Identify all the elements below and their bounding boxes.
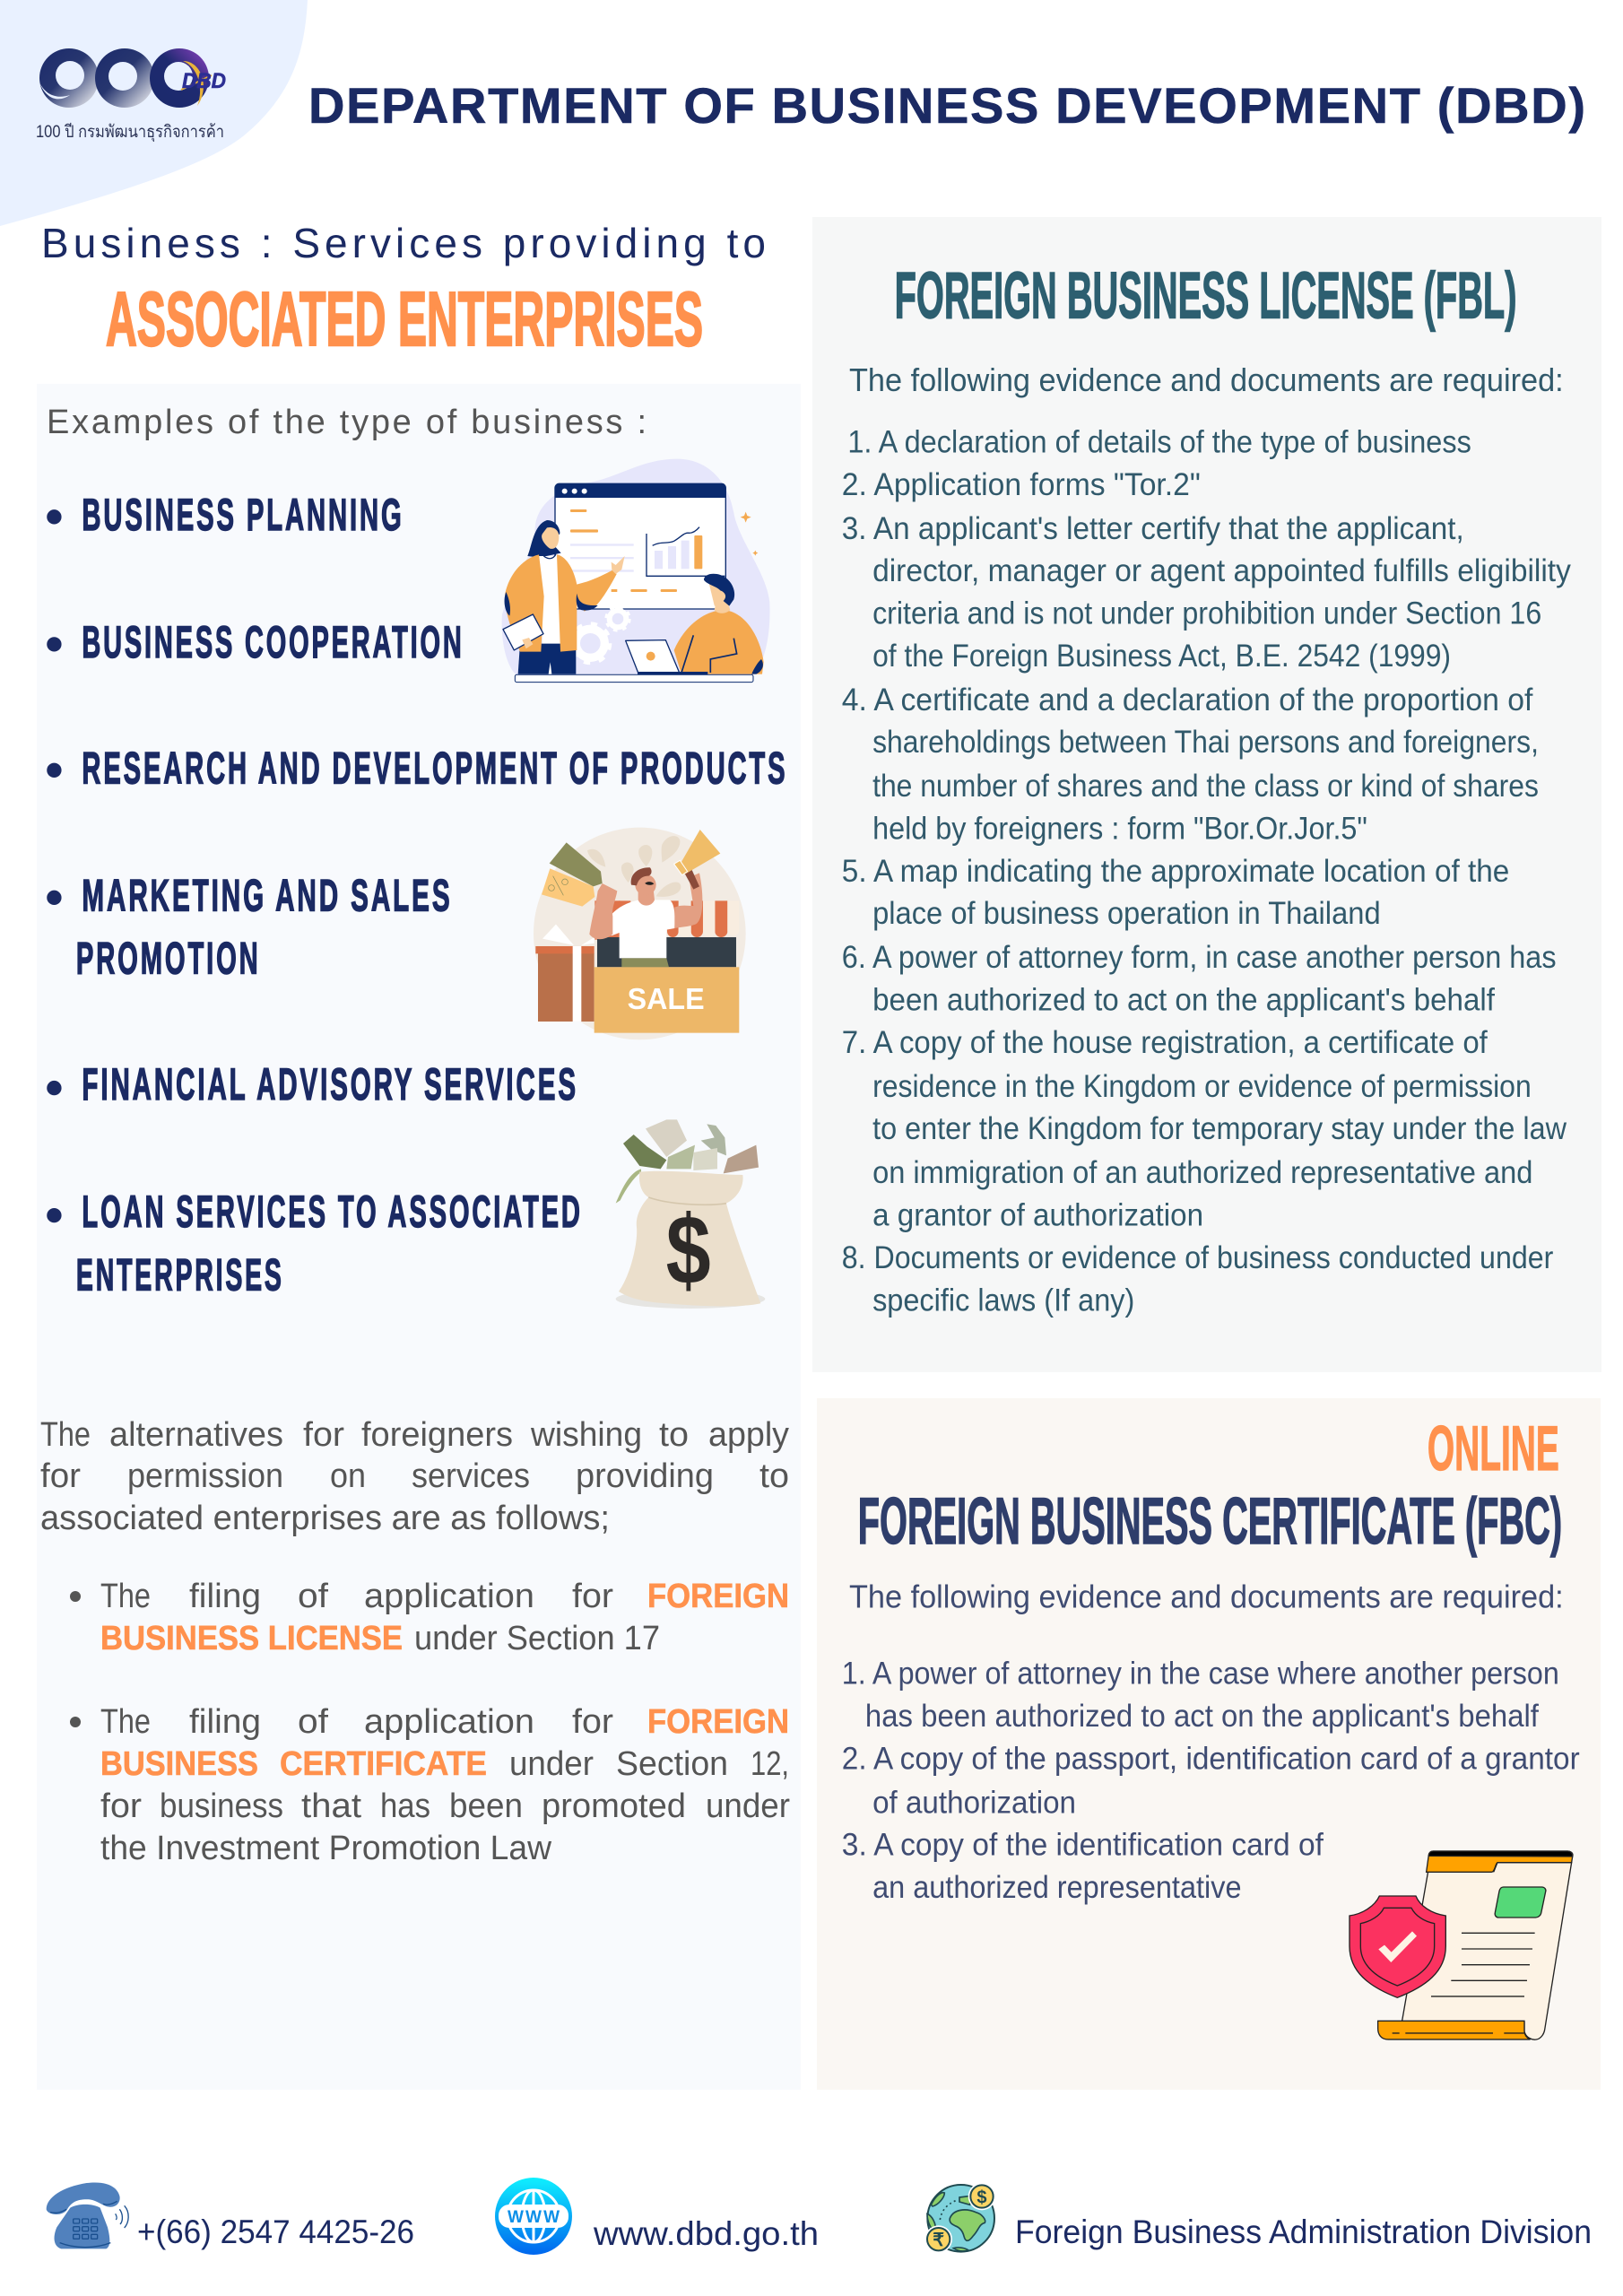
bullet: foreign business license: for — [572, 1578, 613, 1615]
business type list: BUSINESS PLANNING — [82, 490, 404, 540]
icon: earth with coins — [924, 2183, 995, 2253]
required documents list: specific laws (If any) — [872, 1283, 1134, 1318]
bullet: foreign business certificate: filing — [189, 1703, 261, 1741]
business type list: BUSINESS COOPERATION — [82, 617, 464, 667]
required documents list: 1. A declaration of details of the type of business — [847, 425, 1471, 460]
required documents list — [842, 1657, 1580, 1905]
required documents list: 8. Documents or evidence of business conducted under — [842, 1240, 1554, 1275]
alternatives paragraph: for — [303, 1416, 344, 1454]
icon: document with shield — [1350, 1851, 1573, 2039]
business type list — [47, 490, 787, 1300]
bullet: foreign business license: under Section 17 — [414, 1620, 660, 1657]
alternatives paragraph: for — [40, 1457, 81, 1495]
bullet: foreign business certificate: business — [160, 1787, 283, 1825]
alternatives paragraph: to — [659, 1416, 689, 1454]
required documents list: 3. A copy of the identification card of — [842, 1828, 1324, 1863]
alternatives paragraph: apply — [708, 1416, 789, 1454]
website address: www.dbd.go.th — [593, 2215, 819, 2252]
alternatives paragraph: foreigners — [361, 1416, 513, 1454]
alternatives paragraph: The — [40, 1416, 91, 1454]
business type list: FINANCIAL ADVISORY SERVICES — [82, 1059, 578, 1109]
bullet: foreign business certificate: under — [509, 1745, 594, 1783]
required documents list: the number of shares and the class or kind of shares — [872, 769, 1539, 804]
bullet: foreign business license: FOREIGN — [647, 1578, 789, 1615]
footer: phone — [47, 2182, 414, 2250]
required documents list: of authorization — [872, 1785, 1076, 1820]
alternatives paragraph: to — [759, 1457, 789, 1495]
bullet: foreign business license: filing — [189, 1578, 261, 1615]
bullet: foreign business certificate: has — [380, 1787, 430, 1825]
bullet: foreign business certificate: the Investment Promotion Law — [100, 1830, 552, 1867]
icon: money bag: $ — [666, 1196, 711, 1306]
required documents list: criteria and is not under prohibition under Section 16 — [872, 596, 1541, 631]
required documents list: a grantor of authorization — [872, 1198, 1203, 1233]
heading: associated enterprises: ASSOCIATED ENTERPRISES — [106, 277, 703, 362]
bullet: foreign business certificate: promoted — [542, 1787, 686, 1825]
panel: online foreign business certificate — [817, 1398, 1601, 2090]
bullet: foreign business certificate: for — [100, 1787, 142, 1825]
phone number: +(66) 2547 4425-26 — [137, 2213, 414, 2250]
required documents list: of the Foreign Business Act, B.E. 2542 (1999) — [872, 639, 1451, 674]
bullet: foreign business license: of — [298, 1578, 328, 1615]
alternatives paragraph: wishing — [530, 1416, 642, 1454]
footer: division — [924, 2183, 1592, 2253]
icon: earth with coins: ₹ — [933, 2231, 944, 2250]
icon: www globe — [495, 2178, 572, 2255]
subtitle: Business : Services providing to — [41, 220, 766, 266]
business type list: ENTERPRISES — [76, 1249, 284, 1300]
bullet: foreign business certificate: Section — [616, 1745, 728, 1783]
division name: Foreign Business Administration Division — [1015, 2213, 1592, 2250]
required documents list: has been authorized to act on the applicant's behalf — [865, 1699, 1539, 1734]
alternatives paragraph: alternatives — [109, 1416, 283, 1454]
business type list: RESEARCH AND DEVELOPMENT OF PRODUCTS — [82, 743, 787, 793]
alternatives paragraph: on — [330, 1457, 366, 1495]
required documents list: 2. Application forms "Tor.2" — [842, 467, 1201, 502]
bullet: foreign business certificate: application — [364, 1703, 534, 1741]
business type list: MARKETING AND SALES — [82, 871, 453, 921]
header background shape — [0, 0, 308, 226]
logo: DBD 100 years: 100 ปี กรมพัฒนาธุรกิจการค้า — [36, 122, 224, 143]
icon: money bag — [616, 1119, 765, 1309]
business type list: LOAN SERVICES TO ASSOCIATED — [82, 1187, 583, 1237]
bullet: foreign business license: application — [364, 1578, 534, 1615]
required documents list: 2. A copy of the passport, identification card of a grantor — [842, 1741, 1580, 1776]
bullet: foreign business certificate: been — [449, 1787, 523, 1825]
required documents list: shareholdings between Thai persons and foreigners, — [872, 725, 1539, 760]
examples intro: Examples of the type of business : — [47, 404, 647, 441]
bullet: foreign business certificate: FOREIGN — [647, 1703, 789, 1741]
icon: www globe: WWW — [508, 2208, 560, 2227]
required documents list: to enter the Kingdom for temporary stay under the law — [872, 1111, 1567, 1146]
required documents list: on immigration of an authorized representative and — [872, 1155, 1532, 1190]
intro text: The following evidence and documents are required: — [849, 361, 1564, 398]
bullet: foreign business license: The — [100, 1578, 151, 1615]
bullet: foreign business certificate: 12, — [751, 1745, 789, 1783]
bullet: foreign business certificate: for — [572, 1703, 613, 1741]
bullet: foreign business certificate: under — [706, 1787, 790, 1825]
intro text: The following evidence and documents are required: — [849, 1578, 1564, 1615]
bullet: foreign business certificate: CERTIFICATE — [280, 1745, 487, 1783]
title: DEPARTMENT OF BUSINESS DEVEOPMENT (DBD) — [308, 77, 1585, 134]
alternatives paragraph — [40, 1416, 789, 1537]
required documents list: an authorized representative — [872, 1870, 1242, 1905]
required documents list: director, manager or agent appointed fulfills eligibility — [872, 553, 1571, 588]
logo: DBD 100 years: DBD — [182, 69, 226, 93]
footer: website — [495, 2178, 819, 2255]
icon: earth with coins: $ — [976, 2187, 987, 2207]
alternatives paragraph: associated enterprises are as follows; — [40, 1500, 610, 1537]
panel: business types and alternatives — [37, 384, 801, 2090]
panel: foreign business license — [812, 217, 1601, 1372]
required documents list: residence in the Kingdom or evidence of permission — [872, 1069, 1532, 1104]
icon: business planning illustration — [502, 459, 770, 683]
bullet: foreign business certificate — [70, 1703, 790, 1867]
icon: marketing and sales illustration: SALE — [628, 983, 705, 1016]
business type list: PROMOTION — [76, 934, 261, 984]
required documents list: 5. A map indicating the approximate location of the — [842, 854, 1509, 889]
bullet: foreign business certificate: of — [298, 1703, 328, 1741]
icon: telephone — [47, 2182, 128, 2248]
logo: DBD 100 years — [36, 48, 226, 143]
required documents list — [842, 425, 1571, 1318]
required documents list: 1. A power of attorney in the case where another person — [842, 1657, 1559, 1692]
icon: marketing and sales illustration — [534, 828, 746, 1039]
bullet: foreign business license: BUSINESS LICENSE — [100, 1620, 403, 1657]
alternatives paragraph: providing — [576, 1457, 714, 1495]
required documents list: held by foreigners : form "Bor.Or.Jor.5" — [872, 812, 1367, 847]
bullet: foreign business license — [70, 1578, 789, 1657]
required documents list: place of business operation in Thailand — [872, 896, 1381, 931]
required documents list: 4. A certificate and a declaration of the proportion of — [842, 683, 1533, 718]
required documents list: been authorized to act on the applicant's behalf — [872, 983, 1495, 1018]
bullet: foreign business certificate: that — [301, 1787, 361, 1825]
bullet: foreign business certificate: The — [100, 1703, 151, 1741]
required documents list: 6. A power of attorney form, in case another person has — [842, 940, 1557, 975]
alternatives paragraph: permission — [127, 1457, 283, 1495]
required documents list: 7. A copy of the house registration, a certificate of — [842, 1025, 1488, 1060]
alternatives paragraph: services — [412, 1457, 530, 1495]
required documents list: 3. An applicant's letter certify that the applicant, — [842, 511, 1464, 546]
bullet: foreign business certificate: BUSINESS — [100, 1745, 258, 1783]
